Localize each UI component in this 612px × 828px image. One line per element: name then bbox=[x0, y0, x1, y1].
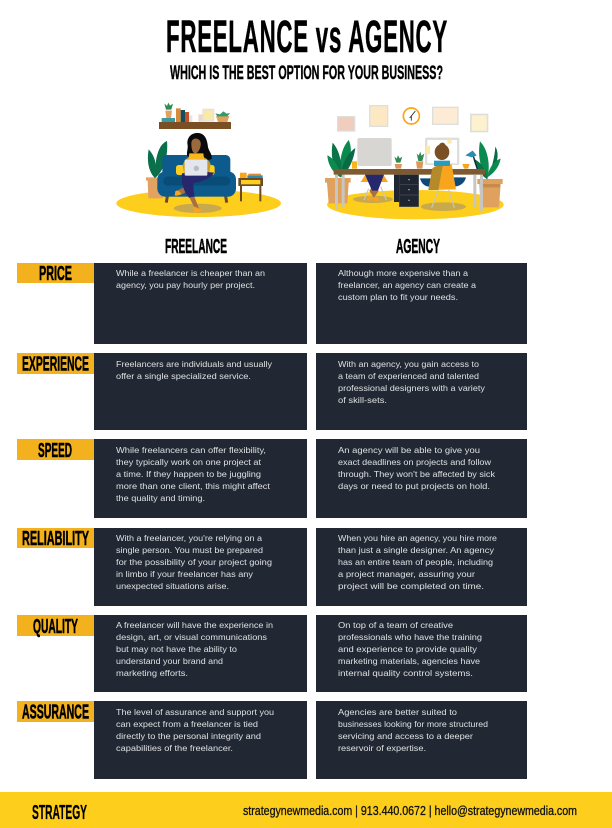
label: experience: EXPERIENCE bbox=[22, 354, 89, 376]
panel: freelance quality bbox=[94, 615, 307, 692]
panel: freelance speed: more than one client, this might affect bbox=[116, 481, 271, 491]
illustration: agency office bbox=[325, 105, 504, 219]
label: reliability bbox=[17, 528, 94, 550]
label: experience bbox=[17, 353, 94, 376]
panel: freelance reliability: for the possibility of your project going bbox=[116, 557, 272, 567]
panel: freelance assurance: The level of assurance and support you bbox=[116, 707, 274, 717]
row: experience bbox=[17, 353, 527, 430]
panel: freelance speed bbox=[94, 439, 307, 518]
panel: freelance experience bbox=[94, 353, 307, 430]
panel: freelance reliability: in limbo if your freelancer has any bbox=[116, 569, 254, 579]
label: speed: SPEED bbox=[38, 440, 72, 462]
row: assurance bbox=[17, 701, 527, 779]
panel: agency reliability: a project manager, assuring your bbox=[338, 569, 475, 579]
row: price bbox=[17, 263, 527, 344]
panel: agency speed: exact deadlines on projects and follow bbox=[338, 457, 492, 467]
panel: agency speed: An agency will be able to give you bbox=[338, 445, 480, 455]
panel: agency quality: marketing materials, agencies have bbox=[338, 656, 480, 666]
row: quality bbox=[17, 615, 527, 692]
panel: freelance experience: offer a single specialized service. bbox=[116, 371, 251, 381]
panel: agency speed: through. They won't be affected by sick bbox=[338, 469, 496, 479]
panel: freelance quality: understand your brand and bbox=[116, 656, 223, 666]
panel: freelance reliability: With a freelancer, you're relying on a bbox=[116, 533, 262, 543]
illustration: freelancer on sofa bbox=[116, 103, 281, 217]
panel: agency assurance: servicing and access to a deeper bbox=[338, 731, 473, 741]
footer logo: STRATEGY bbox=[32, 802, 87, 824]
panel: freelance reliability bbox=[94, 528, 307, 606]
label: assurance bbox=[17, 701, 94, 724]
panel: freelance quality: but may not have the ability to bbox=[116, 644, 237, 654]
panel: agency speed: days or need to put projects on hold. bbox=[338, 481, 490, 491]
label: quality bbox=[17, 615, 94, 638]
label: speed bbox=[17, 439, 94, 462]
panel: freelance price: While a freelancer is cheaper than an bbox=[116, 268, 265, 278]
panel: freelance quality: A freelancer will have the experience in bbox=[116, 620, 273, 630]
panel: freelance speed: the quality and timing. bbox=[116, 493, 205, 503]
row: speed bbox=[17, 439, 527, 518]
panel: freelance assurance bbox=[94, 701, 307, 779]
panel: freelance speed: a time. If they happen to be juggling bbox=[116, 469, 261, 479]
panel: freelance assurance: capabilities of the freelancer. bbox=[116, 743, 233, 753]
panel: agency quality: and experience to provide quality bbox=[338, 644, 478, 654]
panel: freelance experience: Freelancers are individuals and usually bbox=[116, 359, 273, 369]
panel: agency experience: With an agency, you gain access to bbox=[338, 359, 479, 369]
panel: agency reliability bbox=[316, 528, 527, 606]
panel: agency experience bbox=[316, 353, 527, 430]
panel: agency price bbox=[316, 263, 527, 344]
panel: freelance assurance: can expect from a freelancer is tied bbox=[116, 719, 258, 729]
column heading: agency: AGENCY bbox=[396, 236, 440, 258]
panel: agency quality: professionals who have the training bbox=[338, 632, 482, 642]
panel: freelance quality: design, art, or visual communications bbox=[116, 632, 268, 642]
label: reliability: RELIABILITY bbox=[22, 528, 89, 550]
label: quality: QUALITY bbox=[33, 616, 78, 638]
panel: agency price: Although more expensive than a bbox=[338, 268, 468, 278]
panel: agency quality: On top of a team of creative bbox=[338, 620, 453, 630]
label: price bbox=[17, 263, 94, 285]
panel: agency experience: professional designers with a variety bbox=[338, 383, 486, 393]
panel: freelance price: agency, you pay hourly per project. bbox=[116, 280, 255, 290]
panel: freelance reliability: single person. You must be prepared bbox=[116, 545, 263, 555]
panel: freelance quality: marketing efforts. bbox=[116, 668, 188, 678]
row: reliability bbox=[17, 528, 527, 606]
panel: agency reliability: When you hire an agency, you hire more bbox=[338, 533, 497, 543]
label: price: PRICE bbox=[39, 263, 72, 285]
panel: agency assurance: businesses looking for more structured bbox=[338, 719, 488, 729]
panel: agency price: custom plan to fit your needs. bbox=[338, 292, 458, 302]
panel: agency quality bbox=[316, 615, 527, 692]
panel: agency reliability: has an entire team of people, including bbox=[338, 557, 493, 567]
panel: agency reliability: project will be completed on time. bbox=[338, 581, 484, 591]
panel: agency assurance: Agencies are better suited to bbox=[338, 707, 457, 717]
column heading: freelance: FREELANCE bbox=[165, 236, 227, 258]
panel: agency experience: a team of experienced and talented bbox=[338, 371, 479, 381]
panel: freelance assurance: directly to the personal integrity and bbox=[116, 731, 261, 741]
panel: agency speed bbox=[316, 439, 527, 518]
panel: agency reliability: than just a single designer. An agency bbox=[338, 545, 495, 555]
panel: agency assurance: reservoir of expertise. bbox=[338, 743, 426, 753]
panel: agency experience: of skill-sets. bbox=[338, 395, 387, 405]
footer bbox=[0, 792, 612, 828]
label: assurance: ASSURANCE bbox=[22, 702, 89, 724]
panel: agency price: freelancer, an agency can create a bbox=[338, 280, 476, 290]
panel: freelance price bbox=[94, 263, 307, 344]
panel: freelance speed: they typically work on one project at bbox=[116, 457, 262, 467]
panel: freelance speed: While freelancers can offer flexibility, bbox=[116, 445, 266, 455]
panel: agency assurance bbox=[316, 701, 527, 779]
panel: agency quality: internal quality control systems. bbox=[338, 668, 473, 678]
panel: freelance reliability: unexpected situations arise. bbox=[116, 581, 229, 591]
